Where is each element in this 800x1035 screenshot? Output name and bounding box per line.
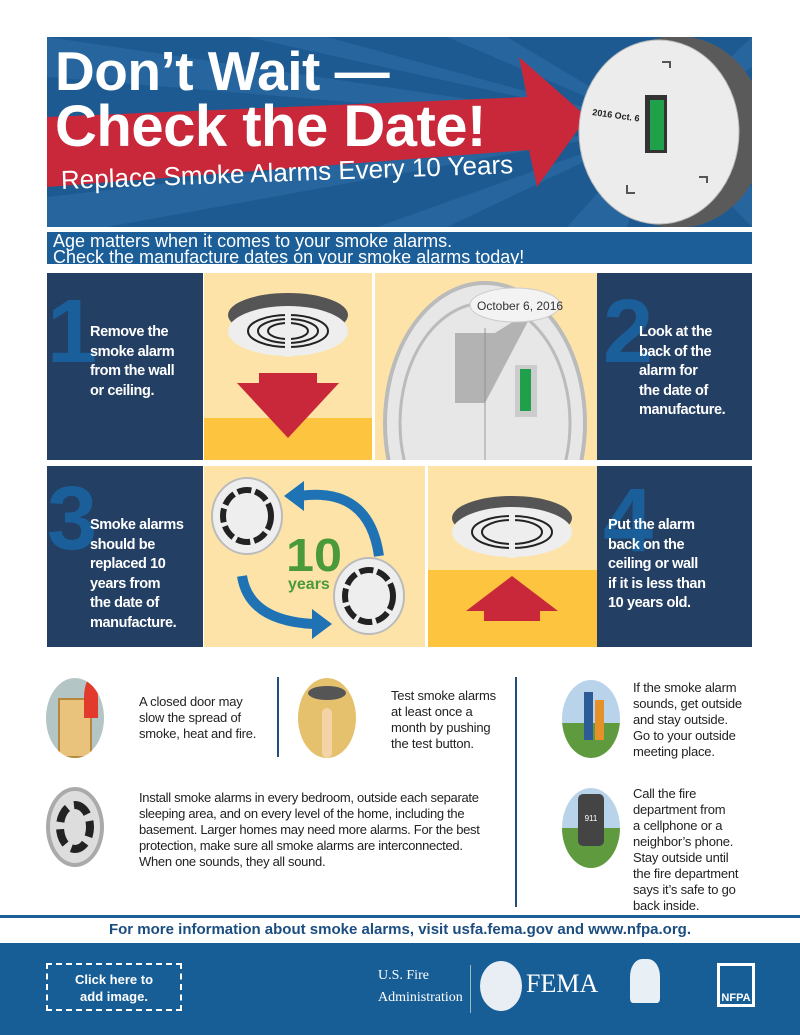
panel: step 3: replaced 10	[90, 556, 165, 572]
panel: step 4: if it is less than	[608, 576, 706, 592]
panel: step 3: years from	[90, 576, 160, 592]
text: get outside: meeting place.	[633, 744, 715, 759]
logo: USFA: U.S. Fire	[378, 968, 429, 983]
title: Check the Date!	[55, 94, 486, 159]
icon: door	[46, 678, 104, 758]
subheader bar	[47, 232, 752, 264]
panel: step 2 illustration: October 6, 2016	[477, 299, 563, 313]
text: door: smoke, heat and fire.	[139, 726, 256, 741]
logo: USFA: Administration	[378, 990, 463, 1005]
panel: step 1 illustration	[204, 273, 372, 460]
icon: test button	[298, 678, 356, 758]
text: door: slow the spread of	[139, 710, 241, 725]
title	[55, 40, 486, 159]
text: install: When one sounds, they all sound.	[139, 854, 325, 869]
panel: step 2: back of the	[639, 344, 711, 360]
panel: step 1: from the wall	[90, 363, 174, 379]
logo: fire is everyone's fight	[630, 959, 660, 1003]
text: test: at least once a	[391, 704, 473, 719]
text: call	[633, 786, 738, 913]
text: install: basement. Larger homes may need more alarms. For the best	[139, 822, 480, 837]
text: call: department from	[633, 802, 725, 817]
text: test: the test button.	[391, 736, 474, 751]
panel: step 1	[47, 273, 203, 460]
text: get outside: If the smoke alarm	[633, 680, 736, 695]
panel: step 4: Put the alarm	[608, 517, 695, 533]
text: get outside	[633, 680, 742, 759]
panel: step 1: smoke alarm	[90, 344, 174, 360]
panel: step 2: the date of	[639, 382, 708, 398]
text: call: Call the fire	[633, 786, 696, 801]
icon: family outside	[562, 680, 620, 758]
logo: USFA	[378, 968, 463, 1005]
panel: step 2: Look at the	[639, 324, 712, 340]
panel: step 2: manufacture.	[639, 402, 725, 418]
text: test: month by pushing	[391, 720, 490, 735]
panel: step 4	[597, 466, 752, 647]
text: test	[391, 688, 496, 751]
text: call: says it’s safe to go	[633, 882, 736, 897]
panel: step 3: the date of	[90, 595, 159, 611]
text: install: protection, make sure all smoke alarms are interconnected.	[139, 838, 463, 853]
text: door	[139, 694, 256, 741]
panel: step 3: 3	[47, 469, 97, 569]
panel: step 3: Smoke alarms	[90, 517, 184, 533]
text: install	[139, 790, 480, 869]
icon: alarm	[46, 787, 104, 867]
logo: FEMA	[480, 961, 598, 1011]
smoke alarm	[579, 36, 765, 228]
subheader bar: Age matters when it comes to your smoke alarms.	[53, 231, 452, 251]
panel: step 2: alarm for	[639, 363, 697, 379]
icon: phone	[562, 788, 620, 868]
text: call: Stay outside until	[633, 850, 728, 865]
panel: step 4: ceiling or wall	[608, 556, 698, 572]
header banner	[47, 37, 752, 227]
title: Don’t Wait —	[55, 40, 389, 102]
text: call: the fire department	[633, 866, 738, 881]
icon: phone: 911	[585, 814, 597, 823]
text: install: Install smoke alarms in every bedroom, outside each separate	[139, 790, 479, 805]
panel: step 4: back on the	[608, 536, 684, 552]
image placeholder	[46, 963, 182, 1011]
text: call: back inside.	[633, 898, 699, 913]
text: install: sleeping area, and on every level of the home, including the	[139, 806, 464, 821]
logo: FEMA: FEMA	[526, 969, 598, 998]
text: call: a cellphone or a	[633, 818, 722, 833]
panel: step 1: Remove the	[90, 324, 168, 340]
text: call: neighbor’s phone.	[633, 834, 733, 849]
text: get outside: sounds, get outside	[633, 696, 742, 711]
panel: step 4: 10 years old.	[608, 595, 691, 611]
panel: step 3 illustration	[204, 466, 425, 647]
image placeholder: add image.	[80, 989, 148, 1004]
panel: step 1: 1	[47, 282, 97, 382]
panel: step 3: should be	[90, 536, 155, 552]
panel: step 4: 4	[603, 471, 653, 571]
logo: NFPA: NFPA	[721, 992, 751, 1004]
subheader bar: Check the manufacture dates on your smoke alarms today!	[53, 247, 524, 267]
text: test: Test smoke alarms	[391, 688, 496, 703]
panel: step 1: or ceiling.	[90, 382, 154, 398]
panel: step 3 illustration: 10	[286, 529, 342, 581]
panel: step 2: 2	[603, 282, 653, 382]
panel: step 2	[597, 273, 752, 460]
text: door: A closed door may	[139, 694, 243, 709]
panel: step 3 illustration: years	[288, 576, 330, 593]
text: get outside: and stay outside.	[633, 712, 728, 727]
footer info line: For more information about smoke alarms, visit usfa.fema.gov and www.nfpa.org.	[109, 921, 691, 938]
red arrow	[47, 57, 587, 187]
panel: step 2 illustration	[375, 273, 597, 460]
image placeholder: Click here to	[75, 972, 153, 987]
smoke alarm: 2016 Oct. 6	[592, 107, 640, 124]
text: get outside: Go to your outside	[633, 728, 736, 743]
subtitle: Replace Smoke Alarms Every 10 Years	[60, 149, 514, 195]
footer	[0, 943, 800, 1035]
logo: NFPA	[717, 963, 755, 1007]
panel: step 3	[47, 466, 203, 647]
panel: step 4 illustration	[428, 466, 597, 647]
panel: step 3: manufacture.	[90, 614, 176, 630]
